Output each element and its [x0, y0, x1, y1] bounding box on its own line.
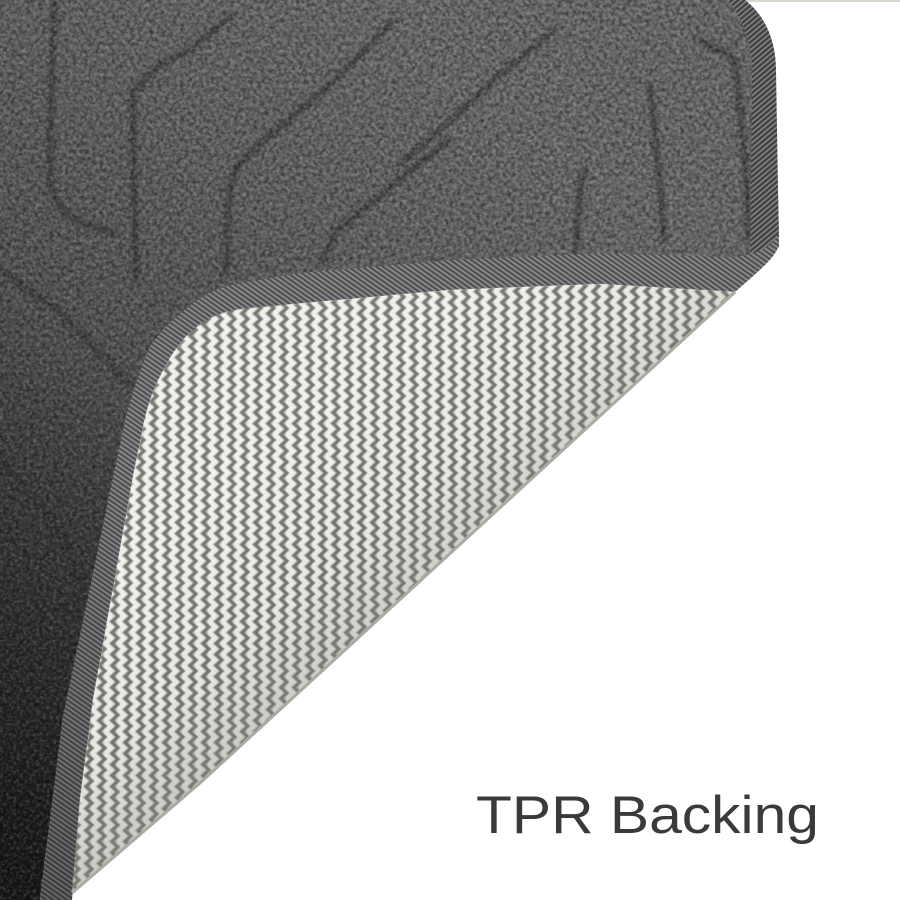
- right side binding of rug: [728, 0, 779, 262]
- label: TPR Backing: TPR Backing: [476, 786, 819, 845]
- folded binding edge: [40, 232, 779, 900]
- TPR backing surface with chevron pattern: [72, 284, 735, 893]
- backing diagonal edge: [72, 292, 735, 893]
- embossed groove pattern: [0, 0, 750, 479]
- top edge sliver: [745, 0, 900, 2]
